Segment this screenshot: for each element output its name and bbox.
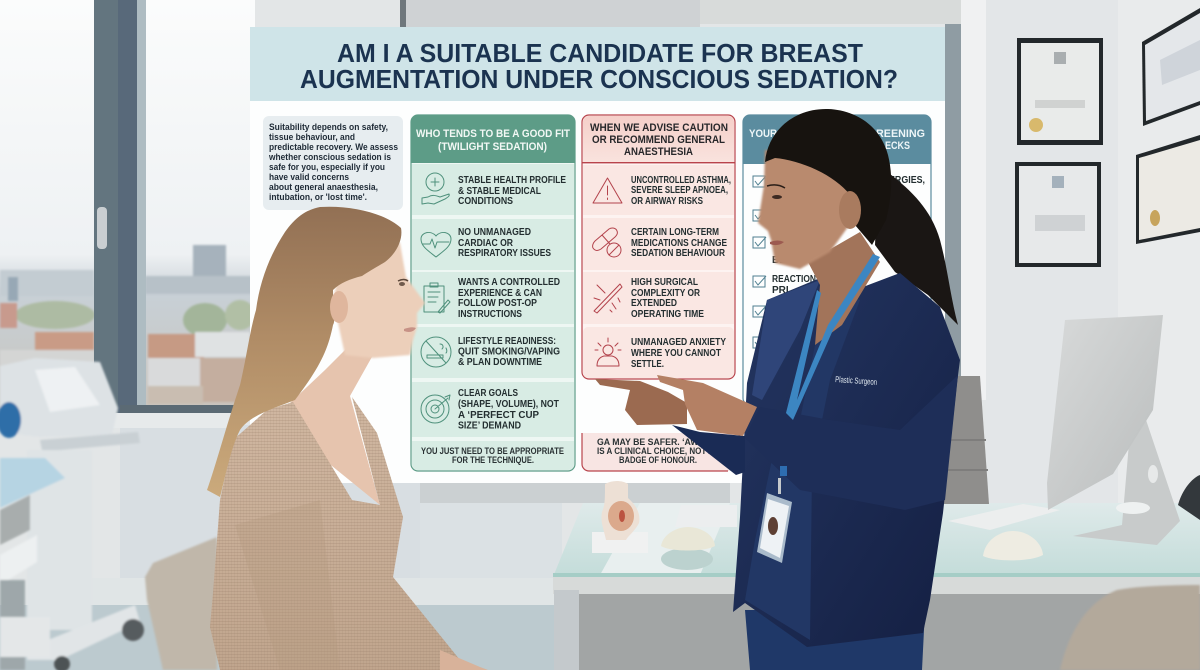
certificate 3 (1142, 8, 1200, 126)
row: lifestyle: LIFESTYLE READINESS: (458, 336, 556, 347)
screening list: BL (772, 255, 785, 266)
doctor far sleeve (672, 425, 745, 475)
intro text box: whether conscious sedation is (268, 152, 391, 163)
row: anxiety: SETTLE. (631, 359, 664, 370)
row: medications: SEDATION BEHAVIOUR (631, 248, 726, 259)
screening heading: YOUR (749, 128, 777, 140)
row: asthma (583, 165, 734, 215)
machine column (27, 450, 92, 630)
row: asthma: SEVERE SLEEP APNOEA, (631, 185, 728, 196)
patient sweater (210, 397, 460, 670)
row: controlled experience: FOLLOW POST-OP (458, 298, 537, 309)
pointing hand: left (595, 379, 687, 425)
caution heading: ANAESTHESIA (624, 146, 693, 158)
doctor face (758, 150, 860, 269)
intro text box (263, 116, 403, 210)
doctor ear (839, 191, 861, 229)
doctor scrub top (745, 285, 860, 640)
good fit footer: FOR THE TECHNIQUE. (452, 455, 534, 465)
caution heading (582, 116, 735, 163)
patient eye and lips (398, 280, 416, 332)
doctor hair (765, 109, 891, 245)
row: medications: CERTAIN LONG-TERM (631, 227, 719, 238)
panel: screening checks (743, 115, 931, 405)
good fit heading: (TWILIGHT SEDATION) (438, 141, 547, 153)
patient chair (145, 537, 217, 670)
row: asthma: OR AIRWAY RISKS (631, 196, 703, 207)
machine head (0, 358, 118, 437)
silicone implant sample (661, 527, 715, 570)
certificate frames on wall (1015, 8, 1200, 267)
doctor jacket (733, 273, 960, 647)
patient ear (330, 291, 348, 323)
intro text box: about general anaesthesia, (269, 182, 378, 193)
screening heading: ECKS (885, 140, 910, 152)
certificate 2 (1015, 162, 1101, 267)
computer monitor (1047, 315, 1180, 545)
row: lifestyle (412, 327, 574, 378)
row: cardiac: CARDIAC OR (458, 238, 514, 249)
row: stable health: & STABLE MEDICAL (458, 186, 541, 197)
good fit heading: WHO TENDS TO BE A GOOD FIT (416, 128, 570, 140)
screening list (753, 175, 925, 348)
intro text box: tissue behaviour, and (269, 132, 355, 143)
doctor ponytail (875, 165, 958, 325)
row: anxiety: WHERE YOU CANNOT (631, 348, 721, 359)
row: lifestyle: QUIT SMOKING/VAPING (458, 346, 560, 358)
doctor (595, 109, 960, 670)
screening list: REACTION (772, 274, 816, 285)
patient hair (207, 207, 401, 497)
row: clear goals: (SHAPE, VOLUME), NOT (458, 399, 559, 410)
screening list: A (898, 185, 905, 196)
paper folder on desk (675, 505, 737, 527)
doctor eye and lips (767, 185, 785, 245)
intro text box: Suitability depends on safety, (269, 122, 388, 133)
lanyard (786, 254, 880, 420)
machine base (27, 605, 140, 660)
panel: caution (582, 115, 735, 379)
infographic poster (250, 27, 945, 483)
row: cardiac (412, 219, 574, 270)
caution footer: BADGE OF HONOUR. (619, 455, 697, 465)
desk glass top (553, 503, 1200, 577)
machine side pad (0, 402, 21, 438)
row: clear goals: A ‘PERFECT CUP (458, 410, 539, 421)
row: medications: MEDICATIONS CHANGE (631, 238, 727, 249)
title: AM I A SUITABLE CANDIDATE FOR BREAST (337, 40, 863, 68)
patient (207, 207, 488, 670)
pointing hand: right (657, 375, 757, 436)
row: clear goals: SIZE’ DEMAND (458, 420, 521, 432)
row: anxiety: UNMANAGED ANXIETY (631, 337, 726, 348)
certificate 1 (1017, 38, 1103, 145)
screening heading: REENING (876, 128, 925, 140)
anatomical breast model (592, 481, 648, 553)
intro text box: predictable recovery. We assess (269, 142, 398, 153)
row: anxiety (583, 327, 734, 378)
doctor jacket placket (752, 280, 820, 400)
row: controlled experience: WANTS A CONTROLLED (458, 277, 560, 288)
window frame (94, 0, 255, 428)
doctor near sleeve (745, 375, 958, 510)
title: AUGMENTATION UNDER CONSCIOUS SEDATION? (300, 66, 898, 94)
row: surgical complexity: OPERATING TIME (631, 309, 704, 320)
second implant sample (983, 531, 1043, 560)
certificate 4 (1136, 135, 1200, 244)
good fit heading (411, 115, 575, 163)
row: controlled experience (412, 272, 574, 324)
city skyline (0, 245, 255, 410)
desk phone (1178, 475, 1200, 520)
good fit footer (412, 441, 574, 470)
equipment: ultrasound machine and couch (0, 358, 144, 670)
row: clear goals: CLEAR GOALS (458, 388, 518, 399)
patient sleeve cuff (440, 650, 488, 670)
desk leg (554, 590, 579, 670)
desk front edge (553, 575, 1200, 594)
row: surgical complexity (583, 272, 734, 324)
exam couch cushion (0, 458, 65, 508)
row: surgical complexity: HIGH SURGICAL (631, 277, 698, 288)
caution footer: IS A CLINICAL CHOICE, NOT A (597, 446, 714, 456)
row: controlled experience: EXPERIENCE & CAN (458, 288, 542, 299)
row: controlled experience: INSTRUCTIONS (458, 309, 522, 320)
caution heading: WHEN WE ADVISE CAUTION (590, 122, 728, 134)
row: asthma: UNCONTROLLED ASTHMA, (631, 175, 731, 186)
intro text box: safe for you, especially if you (269, 162, 385, 173)
grey office chair (943, 376, 989, 504)
row: surgical complexity: COMPLEXITY OR (631, 288, 701, 299)
good fit footer: YOU JUST NEED TO BE APPROPRIATE (421, 446, 564, 456)
row: cardiac: NO UNMANAGED (458, 227, 531, 238)
row: stable health (412, 164, 574, 215)
row: clear goals (412, 382, 574, 437)
row: medications (583, 218, 734, 270)
window with city view (0, 0, 255, 428)
panel: good fit (411, 115, 575, 471)
desk underside (578, 590, 1200, 670)
poster header band (250, 27, 945, 101)
screening list: ERGIES, (889, 175, 925, 186)
patient neck and chest (290, 345, 380, 505)
mouse (1116, 502, 1150, 514)
row: surgical complexity: EXTENDED (631, 298, 677, 309)
foreground chair (1060, 585, 1200, 670)
row: stable health: STABLE HEALTH PROFILE (458, 175, 566, 186)
intro text box: intubation, or 'lost time'. (269, 192, 367, 203)
patient face (333, 225, 425, 358)
caution footer (582, 433, 735, 471)
intro text box: have valid concerns (269, 172, 349, 183)
keyboard (948, 504, 1060, 530)
caution footer: GA MAY BE SAFER. ‘AWAKE’ (597, 437, 719, 447)
caution heading: OR RECOMMEND GENERAL (592, 134, 725, 146)
ID badge (757, 478, 792, 563)
doctor trousers (745, 610, 925, 670)
embroidered job title: Plastic Surgeon (835, 374, 878, 387)
desk (553, 503, 1200, 670)
row: stable health: CONDITIONS (458, 196, 513, 207)
row: lifestyle: & PLAN DOWNTIME (458, 357, 542, 368)
screening heading (743, 115, 931, 164)
doctor neck (808, 232, 880, 345)
row: cardiac: RESPIRATORY ISSUES (458, 248, 551, 259)
screening list: PRI (772, 285, 789, 296)
title (300, 40, 898, 94)
